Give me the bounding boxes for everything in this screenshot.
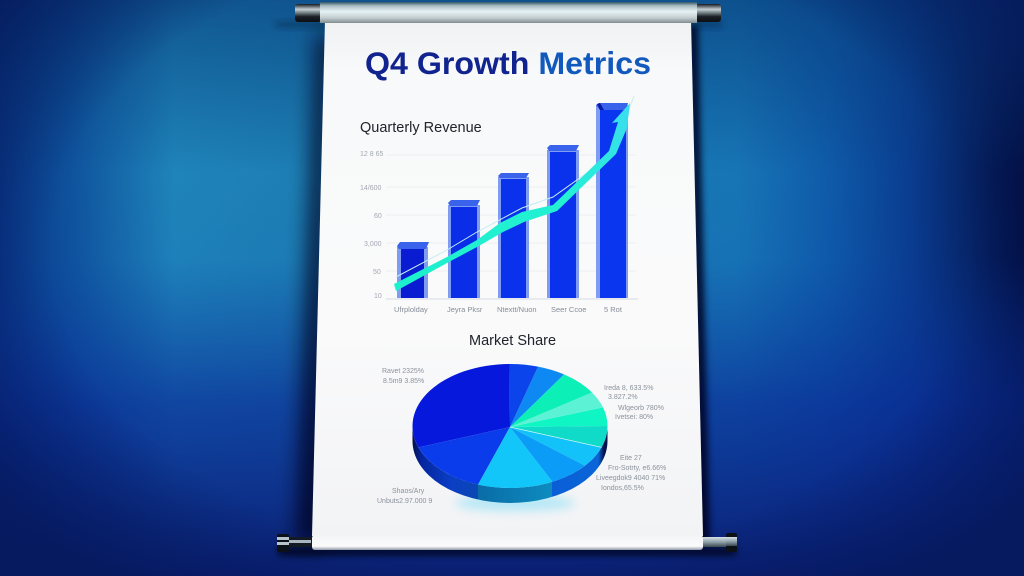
bar chart: quarterly revenue (360, 96, 638, 314)
pie labels bottom right: Liveegdok9 4040 71% (596, 475, 665, 482)
pie side wall (412, 426, 608, 503)
y axis labels: 50 (373, 269, 381, 276)
pie labels top left: Ravet 2325% (382, 368, 424, 375)
pie labels top left: 8.5m9 3.85% (383, 378, 424, 385)
trend arrow (394, 103, 630, 291)
heading: market share: Market Share (469, 333, 556, 349)
x axis labels: Ufrplolday (394, 305, 428, 314)
poster sheet (312, 20, 703, 536)
bar 5 (596, 103, 628, 298)
pie labels bottom left: Shaos/Ary (392, 488, 425, 495)
bar 2 (448, 200, 480, 298)
pie glow (455, 495, 575, 511)
pie labels bottom right: Fro-Sotrty, e6.66% (608, 465, 666, 472)
pie labels bottom left: Unbuts2.97.000 9 (377, 498, 432, 505)
pie labels bottom right (596, 455, 666, 492)
x axis labels (394, 305, 623, 314)
pie labels top right (604, 385, 664, 421)
y axis labels (360, 151, 383, 300)
x axis labels: Ntextt/Nuon (497, 305, 537, 314)
y axis labels: 60 (374, 213, 382, 220)
y axis labels: 3,000 (364, 241, 382, 248)
heading: quarterly revenue: Quarterly Revenue (360, 120, 482, 136)
pie labels top right: Wlgeorb 780% (618, 405, 664, 412)
pie labels top left (382, 368, 424, 385)
pie labels bottom right: Iondos,65.5% (601, 485, 644, 492)
x axis labels: Jeyra Pksr (447, 305, 483, 314)
y axis labels: 12 8 65 (360, 151, 383, 158)
pie labels top right: Ireda 8, 633.5% (604, 385, 653, 392)
pie labels bottom right: Eite 27 (620, 455, 642, 462)
pie labels bottom left (377, 488, 432, 505)
x axis labels: 5 Rot (604, 305, 623, 314)
pie slices (413, 364, 608, 488)
top roller (295, 2, 721, 23)
bar 3 (498, 173, 529, 298)
bar 1 (397, 242, 429, 298)
trend line thin (396, 96, 634, 277)
y axis labels: 14/600 (360, 185, 382, 192)
pie labels top right: 3.827.2% (608, 394, 638, 401)
pie labels top right: Ivetsei: 80% (615, 414, 653, 421)
bar 4 (547, 145, 579, 298)
bottom roller (277, 533, 737, 552)
x axis labels: Seer Ccoe (551, 305, 586, 314)
y axis labels: 10 (374, 293, 382, 300)
title: Q4 Growth Metrics (365, 45, 651, 81)
pie chart: market share (377, 333, 666, 511)
